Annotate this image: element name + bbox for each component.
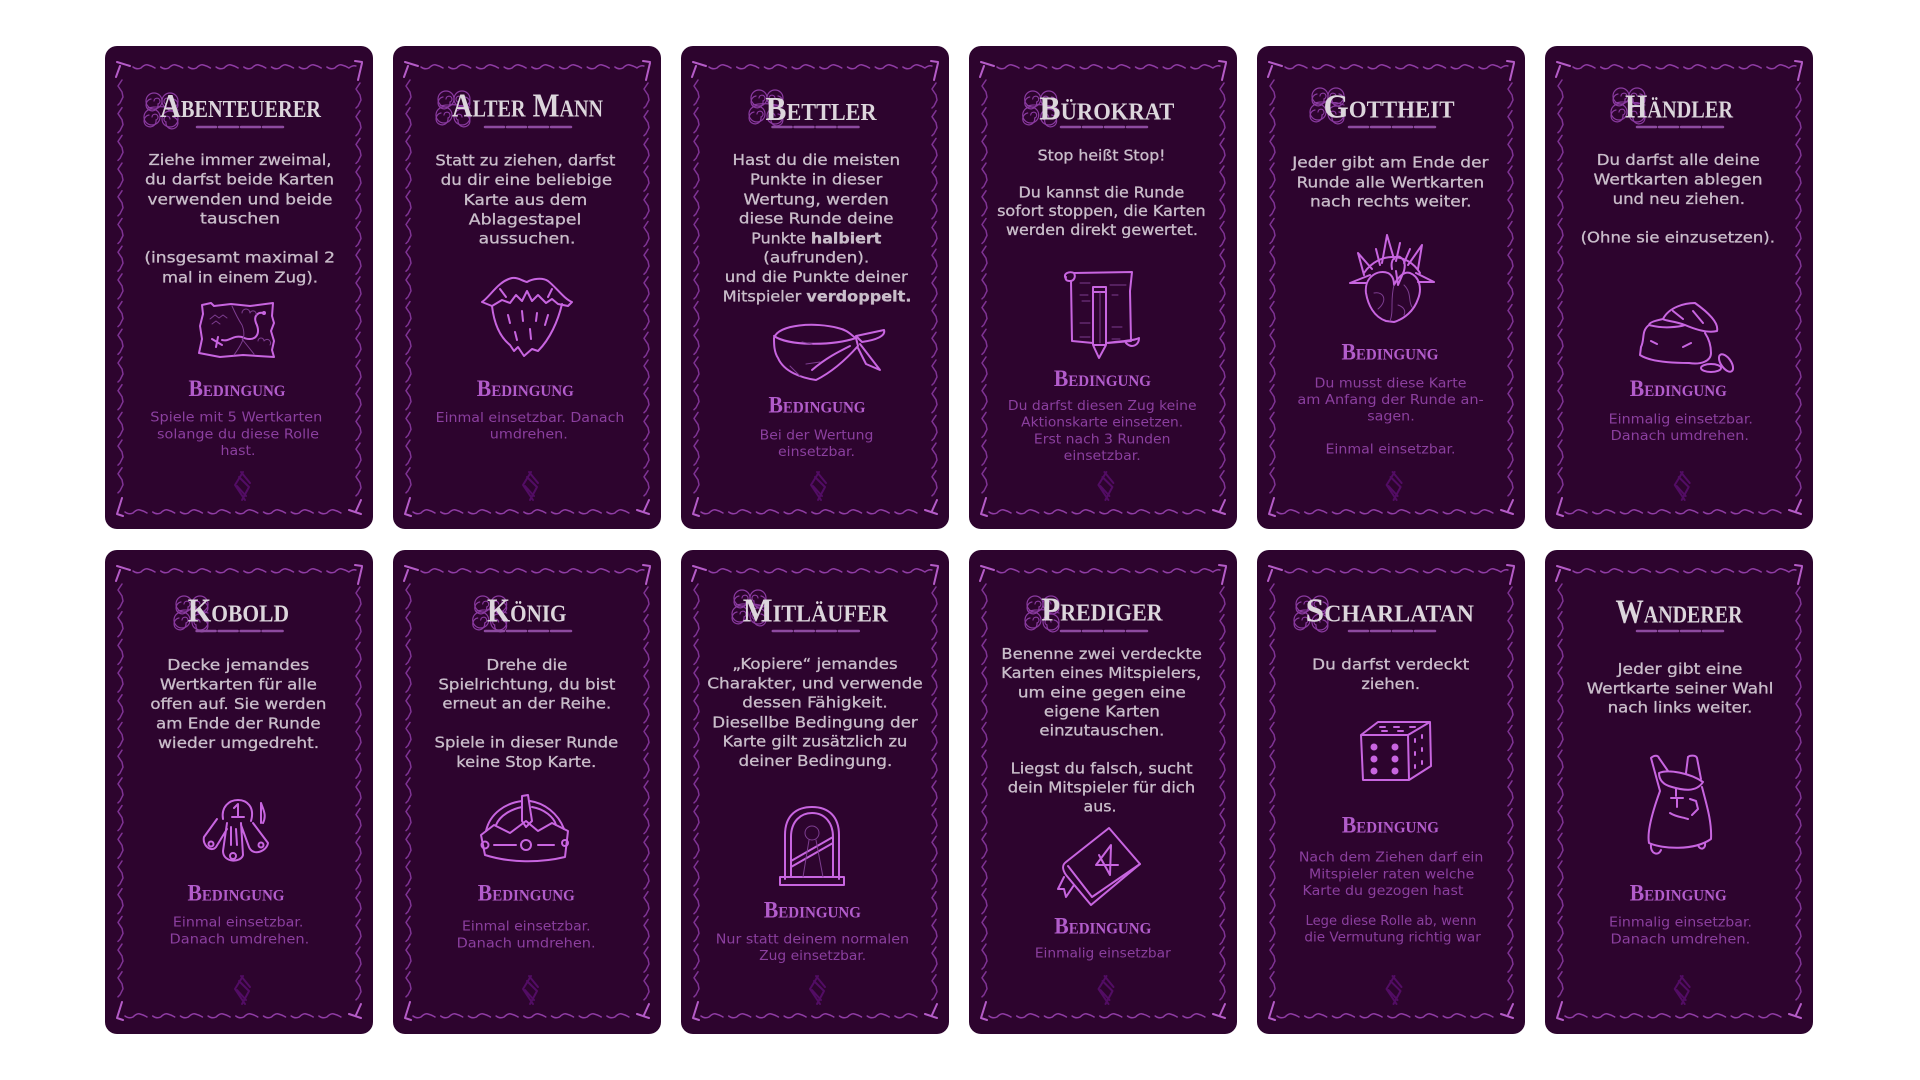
card background: [969, 550, 1237, 1034]
condition text: Einmalig einsetzbar.: [1609, 412, 1753, 427]
description: wieder umgedreht.: [158, 734, 319, 752]
logo mark: [235, 976, 250, 1004]
description: [1291, 154, 1489, 211]
icon: dice: [1361, 722, 1431, 780]
description: am Ende der Runde: [156, 715, 321, 733]
decorative frame: [980, 61, 1226, 516]
decorative frame: [404, 61, 650, 516]
condition text: Du musst diese Karte: [1314, 376, 1466, 391]
title: Bürokrat: [1039, 90, 1174, 127]
description: Diesellbe Bedingung der: [712, 713, 919, 731]
logo mark: [1675, 976, 1690, 1004]
condition text: [716, 932, 909, 964]
description: Karten eines Mitspielers,: [1001, 664, 1201, 682]
logo mark: [235, 472, 250, 500]
condition text: am Anfang der Runde an-: [1297, 393, 1484, 408]
description: [997, 147, 1206, 239]
description: Karte aus dem: [464, 191, 587, 209]
title underline: [1061, 126, 1147, 128]
description: Spiele in dieser Runde: [435, 734, 618, 752]
logo mark: [523, 976, 538, 1004]
title ornament: [1310, 88, 1344, 124]
description: Decke jemandes: [167, 656, 310, 674]
condition text: solange du diese Rolle: [157, 427, 319, 442]
title: Scharlatan: [1306, 593, 1475, 630]
card: Gottheit: [1257, 46, 1525, 529]
condition text: Nach dem Ziehen darf ein: [1299, 851, 1483, 866]
title underline: [1637, 630, 1723, 632]
decorative frame: [692, 565, 938, 1020]
decorative frame: [116, 61, 362, 516]
description: [707, 655, 923, 770]
description: [435, 656, 618, 771]
title underline: [1637, 126, 1723, 128]
condition text: [1008, 399, 1197, 464]
description: Ziehe immer zweimal,: [148, 151, 332, 169]
condition text: [1609, 916, 1752, 947]
card: Kobold: [105, 550, 373, 1034]
description: Punkte in dieser: [750, 171, 883, 189]
title: Alter Mann: [452, 88, 604, 125]
logo mark: [811, 472, 826, 500]
description: Mitspieler verdoppelt.: [723, 288, 911, 306]
condition text: Danach umdrehen.: [1611, 429, 1749, 444]
card: Bettler: [681, 46, 949, 529]
card: Wanderer: [1545, 550, 1813, 1034]
card background: [1545, 550, 1813, 1034]
description: Punkte halbiert: [751, 229, 881, 247]
description: und die Punkte deiner: [725, 268, 909, 286]
title underline: [772, 126, 858, 128]
card: Scharlatan: [1257, 550, 1525, 1034]
card background: [1257, 46, 1525, 529]
card: König: [393, 550, 661, 1034]
icon: money bag and coins: [1640, 303, 1736, 374]
description: Liegst du falsch, sucht: [1011, 759, 1193, 777]
card: Mitläufer: [681, 550, 949, 1034]
condition heading: Bedingung: [764, 897, 861, 922]
description: um eine gegen eine: [1018, 683, 1186, 701]
condition text: einsetzbar.: [1064, 449, 1141, 464]
description: du dir eine beliebige: [441, 171, 612, 189]
card background: [681, 46, 949, 529]
description: keine Stop Karte.: [456, 753, 596, 771]
title underline: [1061, 630, 1147, 632]
title: Bettler: [766, 91, 877, 128]
description: [435, 152, 616, 248]
condition heading: Bedingung: [478, 881, 575, 906]
condition text: Zug einsetzbar.: [759, 949, 866, 964]
title ornament: [749, 90, 783, 126]
description: aus.: [1084, 798, 1116, 816]
condition heading: Bedingung: [1630, 376, 1727, 401]
description: erneut an der Reihe.: [442, 695, 611, 713]
description: Karte gilt zusätzlich zu: [723, 733, 907, 751]
description: Jeder gibt eine: [1616, 660, 1742, 678]
title underline: [197, 126, 283, 128]
description: Wertung, werden: [744, 190, 889, 208]
icon: bandana: [774, 325, 884, 380]
condition heading: Bedingung: [1054, 913, 1152, 938]
card background: [393, 46, 661, 529]
title underline: [485, 126, 571, 128]
description: Wertkarten ablegen: [1594, 170, 1762, 188]
description: [1581, 151, 1775, 247]
decorative frame: [1268, 61, 1514, 516]
title: Händler: [1625, 89, 1734, 126]
condition text: [1609, 412, 1753, 444]
description: verwenden und beide: [148, 190, 332, 208]
icon: book: [1058, 828, 1140, 905]
description: Du darfst verdeckt: [1312, 656, 1469, 674]
condition text: Danach umdrehen.: [170, 932, 309, 947]
condition text: hast.: [220, 444, 256, 459]
description: „Kopiere“ jemandes: [732, 655, 898, 673]
card background: [681, 550, 949, 1034]
description: dessen Fähigkeit.: [742, 694, 888, 712]
description: Charakter, und verwende: [707, 674, 923, 692]
icon: arched window: [780, 807, 844, 885]
card: Prediger: [969, 550, 1237, 1034]
description: Hast du die meisten: [732, 151, 900, 169]
title underline: [773, 630, 859, 632]
condition text: Spiele mit 5 Wertkarten: [150, 411, 322, 426]
description: (aufrunden).: [763, 248, 869, 266]
description: nach links weiter.: [1608, 699, 1752, 717]
logo mark: [1387, 472, 1402, 500]
condition text: Einmal einsetzbar.: [462, 920, 591, 935]
card: Händler: [1545, 46, 1813, 529]
description: aussuchen.: [479, 230, 575, 248]
condition text: sagen.: [1367, 410, 1415, 425]
title ornament: [732, 590, 766, 626]
description: offen auf. Sie werden: [150, 695, 326, 713]
title ornament: [174, 596, 208, 632]
icon: backpack: [1649, 756, 1711, 854]
title: Gottheit: [1324, 89, 1454, 126]
condition heading: Bedingung: [1342, 812, 1439, 837]
description: ziehen.: [1361, 675, 1420, 693]
title ornament: [1023, 91, 1057, 127]
condition heading: Bedingung: [1054, 366, 1151, 391]
description: [723, 151, 911, 306]
description: [1001, 645, 1202, 816]
logo mark: [1675, 472, 1690, 500]
description: sofort stoppen, die Karten: [997, 202, 1206, 220]
condition text: Danach umdrehen.: [1611, 932, 1750, 947]
decorative frame: [692, 61, 938, 516]
condition text: Einmalig einsetzbar.: [1609, 916, 1752, 931]
decorative frame: [1556, 61, 1802, 516]
description: Du darfst alle deine: [1597, 151, 1760, 169]
card: Bürokrat: [969, 46, 1237, 529]
condition text: Nur statt deinem normalen: [716, 932, 909, 947]
condition text: Du darfst diesen Zug keine: [1008, 399, 1197, 414]
condition text: Mitspieler raten welche: [1309, 867, 1474, 882]
condition text: [436, 411, 624, 443]
description: (insgesamt maximal 2: [144, 249, 335, 267]
description: [1587, 660, 1773, 717]
condition text: die Vermutung richtig war: [1304, 931, 1481, 946]
card: Abenteuerer: [105, 46, 373, 529]
description: eigene Karten: [1044, 703, 1160, 721]
title underline: [1349, 630, 1435, 632]
logo mark: [1098, 976, 1114, 1004]
title ornament: [1611, 88, 1645, 124]
condition text: Einmalig einsetzbar: [1035, 946, 1171, 961]
description: diese Runde deine: [739, 210, 894, 228]
title: Abenteuerer: [160, 88, 322, 125]
description: [144, 151, 335, 286]
condition text: Danach umdrehen.: [457, 936, 596, 951]
condition text: [1299, 851, 1483, 946]
description: Spielrichtung, du bist: [438, 675, 616, 693]
description: und neu ziehen.: [1613, 190, 1745, 208]
title underline: [485, 630, 571, 632]
condition text: umdrehen.: [490, 428, 568, 443]
decorative frame: [980, 565, 1226, 1020]
condition text: [457, 920, 596, 951]
condition text: Einmal einsetzbar.: [173, 916, 303, 931]
description: Jeder gibt am Ende der: [1291, 154, 1489, 172]
icon: scroll and pencil: [1065, 272, 1139, 358]
description: Ablagestapel: [469, 210, 581, 228]
condition heading: Bedingung: [188, 376, 286, 401]
card background: [1257, 550, 1525, 1034]
condition text: Bei der Wertung: [760, 428, 873, 443]
title: Wanderer: [1616, 594, 1743, 631]
condition text: [170, 916, 309, 947]
title underline: [197, 630, 283, 632]
description: du darfst beide Karten: [145, 170, 334, 188]
description: mal in einem Zug).: [162, 268, 318, 286]
card background: [1545, 46, 1813, 529]
logo mark: [1098, 472, 1113, 500]
description: [150, 656, 326, 752]
title: Kobold: [188, 593, 289, 630]
title underline: [1349, 126, 1435, 128]
description: Wertkarten für alle: [160, 676, 317, 694]
description: nach rechts weiter.: [1310, 193, 1472, 211]
icon: beard: [482, 278, 572, 356]
condition text: Einmal einsetzbar.: [1326, 442, 1456, 457]
decorative frame: [1268, 565, 1514, 1020]
title: Mitläufer: [743, 593, 889, 630]
condition heading: Bedingung: [768, 393, 866, 418]
condition text: einsetzbar.: [778, 445, 855, 460]
description: (Ohne sie einzusetzen).: [1581, 229, 1775, 247]
decorative frame: [116, 565, 362, 1020]
condition text: Karte du gezogen hast: [1302, 884, 1464, 899]
condition heading: Bedingung: [1342, 339, 1439, 364]
card: Alter Mann: [393, 46, 661, 529]
title: König: [487, 593, 567, 630]
icon: treasure map: [199, 303, 274, 357]
title ornament: [436, 91, 470, 127]
condition text: [760, 428, 873, 460]
condition heading: Bedingung: [1630, 881, 1727, 906]
title ornament: [1025, 596, 1059, 632]
condition heading: Bedingung: [188, 881, 285, 906]
condition text: [1297, 376, 1484, 457]
logo mark: [1386, 976, 1402, 1004]
description: Runde alle Wertkarten: [1297, 173, 1484, 191]
icon: radiant heart: [1350, 235, 1434, 322]
description: Du kannst die Runde: [1019, 184, 1184, 202]
condition text: Erst nach 3 Runden: [1034, 432, 1170, 447]
logo mark: [523, 472, 538, 500]
description: Drehe die: [486, 656, 567, 674]
decorative frame: [1556, 565, 1802, 1020]
condition text: Lege diese Rolle ab, wenn: [1306, 914, 1476, 929]
description: Statt zu ziehen, darfst: [435, 152, 616, 170]
decorative frame: [404, 565, 650, 1020]
title: Prediger: [1041, 591, 1163, 628]
condition heading: Bedingung: [477, 376, 574, 401]
condition text: [150, 411, 322, 459]
card background: [105, 46, 373, 529]
card background: [105, 550, 373, 1034]
description: Wertkarte seiner Wahl: [1587, 679, 1773, 697]
description: tauschen: [200, 210, 280, 228]
card background: [969, 46, 1237, 529]
card background: [393, 550, 661, 1034]
description: einzutauschen.: [1039, 722, 1164, 740]
description: [1312, 656, 1469, 693]
icon: hand holding coin: [204, 800, 268, 861]
description: deiner Bedingung.: [738, 752, 892, 770]
logo mark: [810, 976, 825, 1004]
condition text: Aktionskarte einsetzen.: [1021, 416, 1183, 431]
description: Benenne zwei verdeckte: [1001, 645, 1202, 663]
condition text: Einmal einsetzbar. Danach: [436, 411, 624, 426]
title ornament: [473, 596, 507, 632]
description: werden direkt gewertet.: [1006, 221, 1198, 239]
description: Stop heißt Stop!: [1038, 147, 1166, 165]
icon: crown: [481, 795, 568, 861]
title ornament: [1294, 596, 1328, 632]
title ornament: [144, 93, 178, 129]
description: dein Mitspieler für dich: [1008, 779, 1195, 797]
